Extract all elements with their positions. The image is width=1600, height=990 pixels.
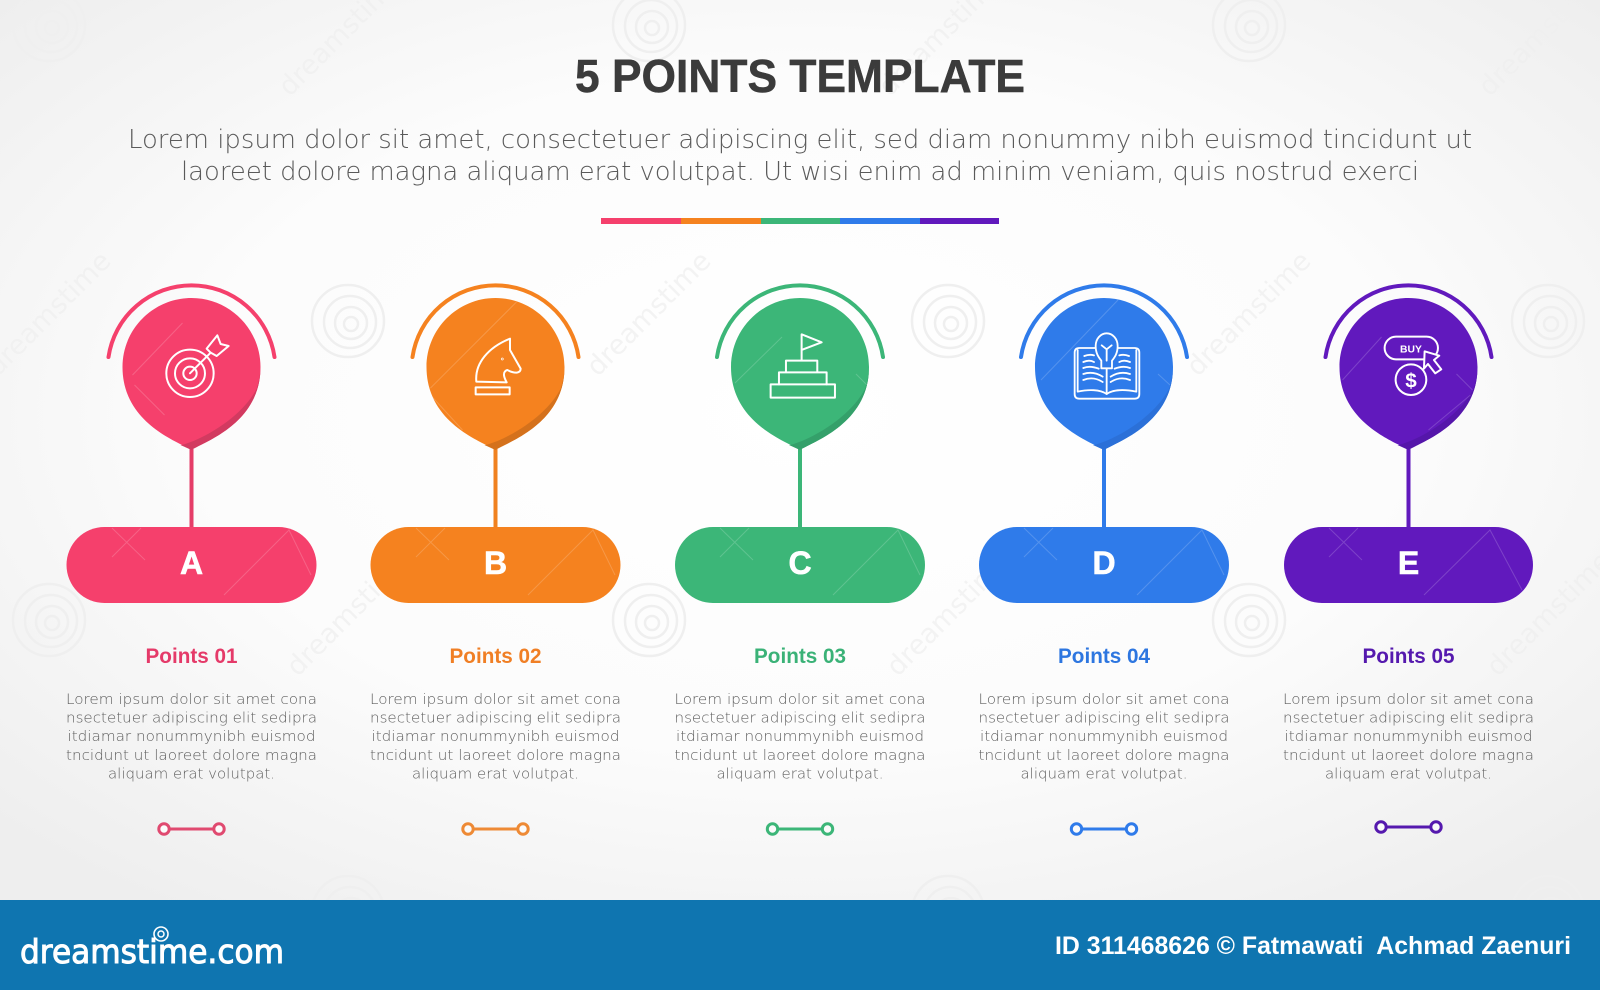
column C: [674, 285, 926, 834]
heading: Points 04: Points 04: [1058, 645, 1150, 668]
subtitle: [128, 125, 1472, 187]
body text: [674, 692, 926, 782]
connector: [463, 824, 528, 834]
column D: [978, 285, 1230, 834]
subtitle: Lorem ipsum dolor sit amet, consectetuer adipiscing elit, sed diam nonummy nibh euismod tincidunt ut: [128, 125, 1472, 155]
body text: Lorem ipsum dolor sit amet cona: [1283, 692, 1534, 708]
icon: buy button with coin and cursor: $: [1405, 369, 1417, 392]
connector: [1071, 824, 1137, 834]
body text: tncidunt ut laoreet dolore magna: [1283, 748, 1534, 764]
footer bar: [0, 900, 1600, 990]
heading: Points 05: Points 05: [1362, 645, 1455, 668]
body text: itdiamar nonummynibh euismod: [1284, 729, 1532, 745]
pill C: [675, 527, 925, 603]
icon: buy button with coin and cursor: [1385, 337, 1441, 395]
body text: aliquam erat volutpat.: [1325, 766, 1492, 782]
colour divider bar: [601, 218, 999, 224]
body text: nsectetuer adipiscing elit sedipra: [674, 711, 926, 727]
pill B: B: [484, 545, 507, 581]
body text: aliquam erat volutpat.: [716, 766, 884, 782]
connector: [1376, 822, 1441, 832]
body text: [370, 692, 621, 782]
body text: nsectetuer adipiscing elit sedipra: [370, 711, 621, 727]
pin E with arc and stem: [1326, 285, 1492, 529]
connector: [767, 824, 833, 834]
body text: tncidunt ut laoreet dolore magna: [978, 748, 1230, 764]
column A: [66, 285, 317, 834]
footer logo: dreamstime.com: [20, 932, 284, 971]
body text: tncidunt ut laoreet dolore magna: [370, 748, 621, 764]
body text: [66, 692, 317, 782]
subtitle: laoreet dolore magna aliquam erat volutpat. Ut wisi enim ad minim veniam, quis nostrud exerci: [181, 157, 1419, 187]
body text: tncidunt ut laoreet dolore magna: [674, 748, 926, 764]
pill E: E: [1398, 545, 1419, 581]
body text: nsectetuer adipiscing elit sedipra: [66, 711, 317, 727]
body text: itdiamar nonummynibh euismod: [980, 729, 1228, 745]
body text: aliquam erat volutpat.: [108, 766, 275, 782]
pin D with arc and stem: [1021, 285, 1187, 529]
text: dreamstime: [281, 546, 417, 682]
body text: aliquam erat volutpat.: [1020, 766, 1188, 782]
pill A: [66, 527, 316, 603]
body text: aliquam erat volutpat.: [412, 766, 579, 782]
pill C: C: [788, 545, 812, 581]
column B: [370, 285, 621, 834]
icon: open book with light bulb: [1075, 333, 1139, 399]
body text: itdiamar nonummynibh euismod: [372, 729, 620, 745]
body text: Lorem ipsum dolor sit amet cona: [978, 692, 1230, 708]
heading: Points 03: Points 03: [754, 645, 846, 668]
icon: buy button with coin and cursor: BUY: [1400, 345, 1422, 356]
body text: Lorem ipsum dolor sit amet cona: [370, 692, 621, 708]
pill E: [1284, 527, 1533, 603]
text: dreamstime: [1181, 246, 1317, 382]
icon: target with arrow: [166, 335, 229, 397]
body text: itdiamar nonummynibh euismod: [68, 729, 316, 745]
pin A with arc and stem: [108, 285, 274, 529]
column E: [1283, 285, 1534, 832]
body text: [1283, 692, 1534, 782]
text: dreamstime: [881, 546, 1017, 682]
pill B: [370, 527, 620, 603]
body text: [978, 692, 1230, 782]
body text: nsectetuer adipiscing elit sedipra: [978, 711, 1230, 727]
title: 5 POINTS TEMPLATE: [575, 50, 1025, 102]
pill A: A: [180, 545, 203, 581]
heading: Points 02: Points 02: [450, 645, 542, 668]
body text: Lorem ipsum dolor sit amet cona: [674, 692, 926, 708]
text: dreamstime: [581, 246, 717, 382]
connector: [159, 824, 224, 834]
body text: tncidunt ut laoreet dolore magna: [66, 748, 317, 764]
icon: flag on steps: [771, 334, 835, 398]
footer credit: ID 311468626 © Fatmawati Achmad Zaenuri: [1055, 932, 1571, 960]
body text: itdiamar nonummynibh euismod: [676, 729, 924, 745]
body text: Lorem ipsum dolor sit amet cona: [66, 692, 317, 708]
pin B with arc and stem: [412, 285, 578, 529]
pin C with arc and stem: [717, 285, 883, 529]
pill D: D: [1092, 545, 1116, 581]
pill D: [979, 527, 1229, 603]
icon: chess knight: [476, 339, 521, 394]
body text: nsectetuer adipiscing elit sedipra: [1283, 711, 1534, 727]
heading: Points 01: Points 01: [146, 645, 238, 668]
